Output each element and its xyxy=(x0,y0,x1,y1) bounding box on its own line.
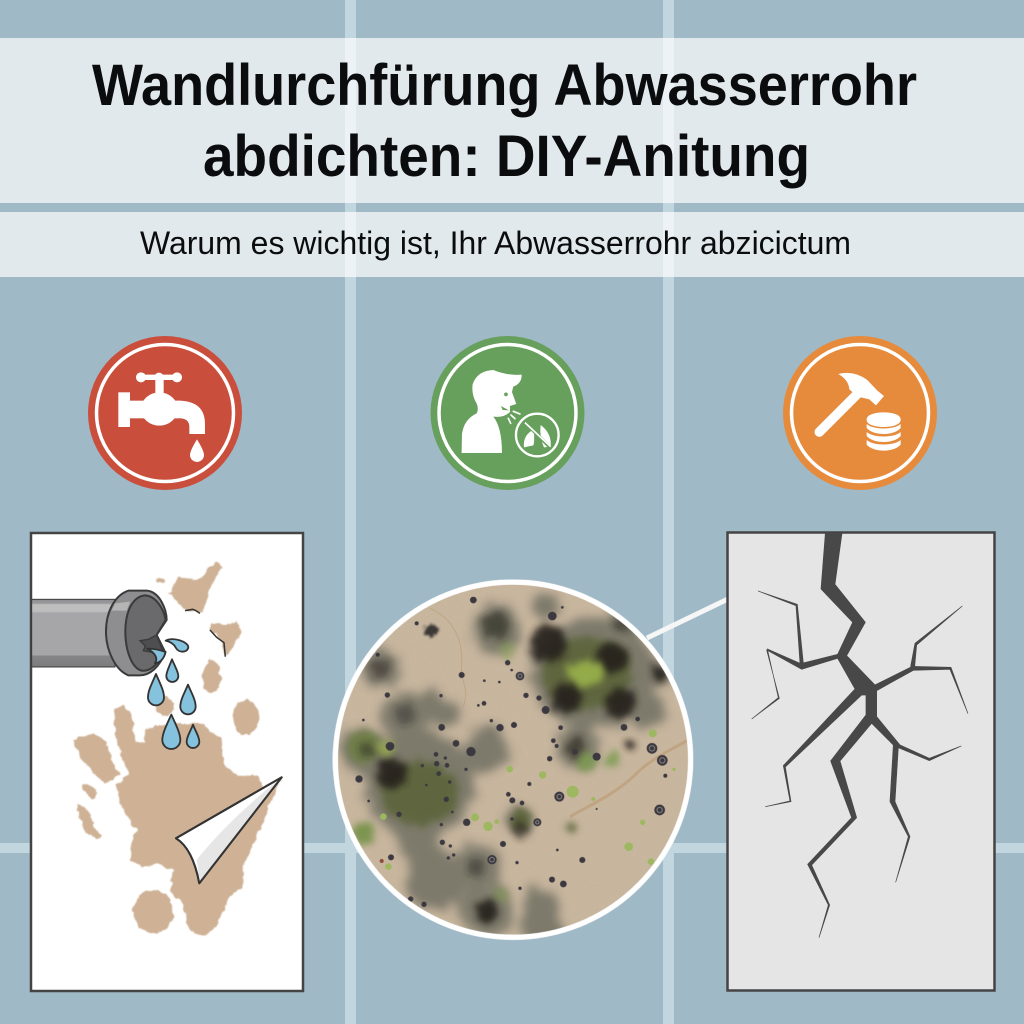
mold dark clusters xyxy=(359,612,666,923)
water drops xyxy=(147,639,199,749)
wall streaks xyxy=(430,608,688,817)
subtitle text: Warum es wichtig ist, Ihr Abwasserrohr abzicictum xyxy=(140,225,851,261)
paper grain xyxy=(330,577,697,943)
light green spots xyxy=(380,729,676,870)
crack lines xyxy=(752,533,968,938)
peeling paint xyxy=(176,777,282,883)
water stain xyxy=(73,562,282,937)
icon: orange hammer and coins xyxy=(783,336,937,490)
icon: red leaking faucet xyxy=(88,336,242,490)
connector line from mold circle to crack panel xyxy=(647,599,728,638)
spore highlights xyxy=(490,674,665,862)
wall cracks in stain xyxy=(185,609,225,657)
panel: cracked wall xyxy=(728,532,994,990)
icon: green person coughing with lungs xyxy=(430,336,584,490)
panel: mold magnified circle xyxy=(330,577,697,953)
subtitle banner xyxy=(0,212,1024,277)
mold olive mass xyxy=(347,637,632,903)
broken pipe xyxy=(32,591,167,675)
dark spore dots xyxy=(355,597,668,907)
title text: Wandlurchfürung Abwasserrohr xyxy=(92,53,917,118)
mold bright green centers xyxy=(379,661,603,756)
title text: abdichten: DIY-Anitung xyxy=(203,124,810,189)
title text xyxy=(92,53,917,189)
panel: water leak with stain xyxy=(31,533,303,991)
title banner xyxy=(0,38,1024,203)
small dark tuft xyxy=(424,623,438,637)
mold gray halo xyxy=(340,593,671,953)
